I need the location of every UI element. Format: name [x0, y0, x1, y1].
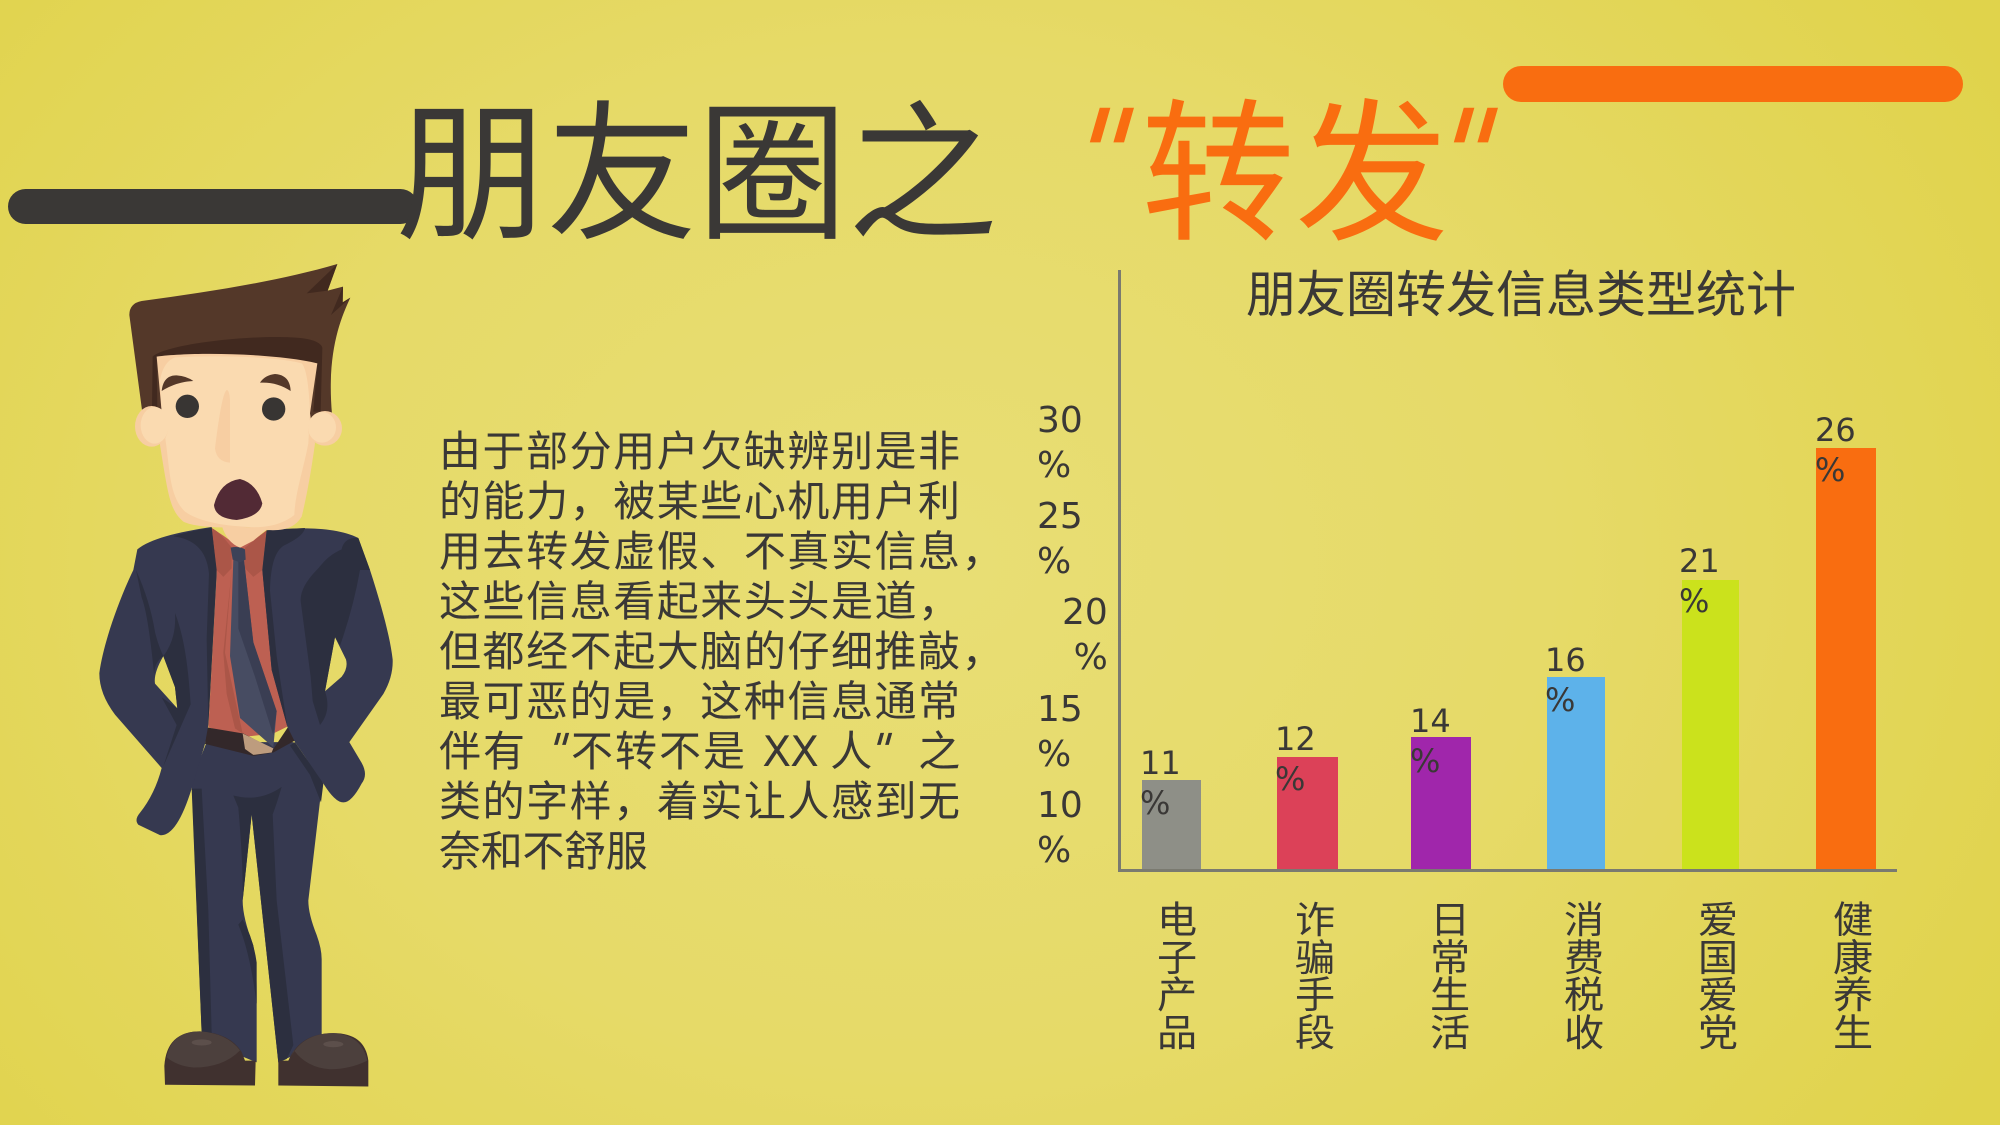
category label 日常生活: 日常生活	[1430, 898, 1470, 1054]
body paragraph: 奈和不舒服	[439, 827, 648, 876]
shoes	[164, 1031, 368, 1086]
bar: 诈骗手段	[1277, 757, 1338, 869]
bar: 电子产品	[1142, 780, 1201, 869]
title: 转发	[1141, 86, 1449, 265]
trousers	[192, 742, 323, 1062]
category label 消费税收: 消费税收	[1564, 898, 1604, 1054]
y axis label 25%: 25 %	[1037, 496, 1083, 582]
mouth	[214, 479, 262, 520]
data label 16%: 16 %	[1545, 641, 1586, 719]
category label 电子产品: 电子产品	[1157, 898, 1197, 1054]
face	[157, 354, 317, 530]
title: "	[1416, 83, 1517, 232]
data label 12%: 12 %	[1275, 720, 1316, 798]
bar: 消费税收	[1547, 677, 1605, 869]
y axis label 20%: 20 %	[1062, 592, 1108, 678]
bar: 爱国爱党	[1682, 580, 1739, 869]
necktie	[230, 547, 277, 747]
head	[129, 264, 350, 530]
category label 健康养生: 健康养生	[1833, 898, 1873, 1054]
data label 14%: 14 %	[1410, 702, 1451, 780]
body paragraph: 伴有 不转不是 XX 人 之	[439, 727, 962, 776]
category label 爱国爱党: 爱国爱党	[1698, 898, 1738, 1054]
eyes	[176, 395, 199, 418]
bar: 健康养生	[1816, 448, 1876, 869]
data label 11%: 11 %	[1140, 744, 1181, 822]
eyebrows	[162, 375, 193, 391]
ears	[135, 406, 168, 447]
data label 21%: 21 %	[1679, 542, 1720, 620]
bar: 日常生活	[1411, 737, 1471, 869]
body paragraph: 用去转发虚假、不真实信息，	[439, 527, 1005, 576]
belt	[205, 727, 295, 756]
orange decorative bar right of title	[1503, 66, 1963, 102]
title	[396, 83, 1517, 265]
body paragraph	[439, 427, 1005, 876]
y axis label 15%: 15 %	[1037, 689, 1083, 775]
body paragraph: 类的字样，着实让人感到无	[439, 777, 962, 826]
y axis line	[1118, 270, 1121, 872]
y axis label 10%: 10 %	[1037, 785, 1083, 871]
category label 诈骗手段: 诈骗手段	[1295, 898, 1335, 1054]
body paragraph: 由于部分用户欠缺辨别是非	[439, 427, 962, 476]
body paragraph: 最可恶的是，这种信息通常	[439, 677, 962, 726]
neck and shirt	[208, 525, 287, 737]
body paragraph: "	[541, 725, 576, 776]
dark decorative bar left of title	[8, 189, 418, 224]
title: "	[1052, 83, 1153, 232]
hair	[129, 264, 350, 420]
body and clothing	[99, 525, 393, 1086]
body paragraph: 的能力，被某些心机用户利	[439, 477, 962, 526]
body paragraph: 这些信息看起来头头是道，	[439, 577, 962, 626]
y axis label 30%: 30 %	[1037, 400, 1083, 486]
x axis line	[1118, 869, 1897, 872]
chart title: 朋友圈转发信息类型统计	[1246, 266, 1796, 324]
title: 朋友圈之	[396, 88, 998, 263]
data label 26%: 26 %	[1815, 411, 1856, 489]
body paragraph: "	[864, 725, 899, 776]
nose	[215, 390, 230, 463]
body paragraph: 但都经不起大脑的仔细推敲，	[439, 627, 1005, 676]
suit jacket	[99, 527, 393, 835]
